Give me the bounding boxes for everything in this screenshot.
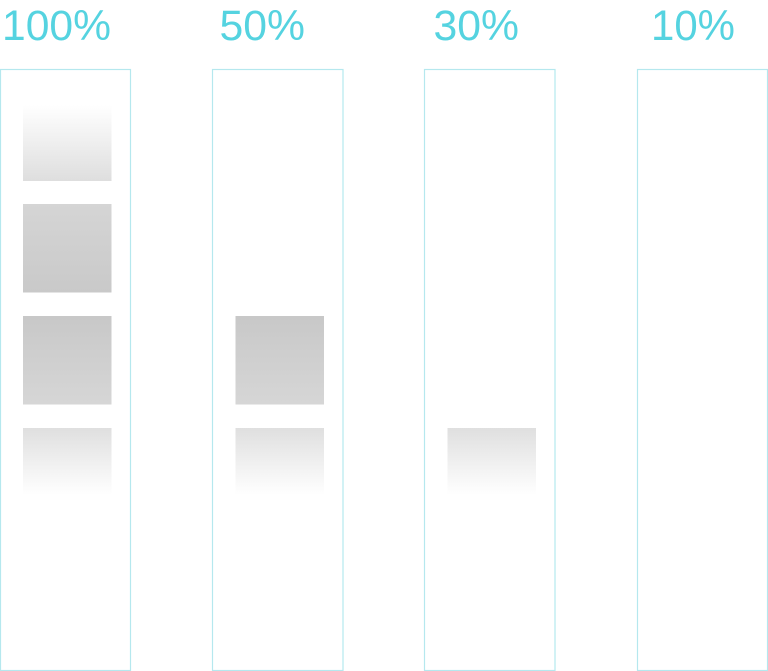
block: bottom fading <box>448 428 536 495</box>
block: top fading <box>23 105 112 181</box>
label: 50%: 50% <box>220 2 305 50</box>
column frame: 100% <box>0 70 130 670</box>
block: bottom fading <box>23 428 112 495</box>
block: bottom fading <box>236 428 324 495</box>
label: 30%: 30% <box>434 2 519 50</box>
column: 10% <box>638 2 768 670</box>
column: 50% <box>212 2 343 670</box>
block: upper solid <box>23 204 112 292</box>
column frame: 50% <box>212 70 343 670</box>
label: 100%: 100% <box>2 2 111 50</box>
label: 10%: 10% <box>651 2 735 50</box>
column: 100% <box>0 2 130 670</box>
column frame: 30% <box>424 70 555 670</box>
column: 30% <box>424 2 555 670</box>
block: lower solid <box>236 316 324 404</box>
block: lower solid <box>23 316 112 404</box>
column frame: 10% <box>638 70 768 670</box>
